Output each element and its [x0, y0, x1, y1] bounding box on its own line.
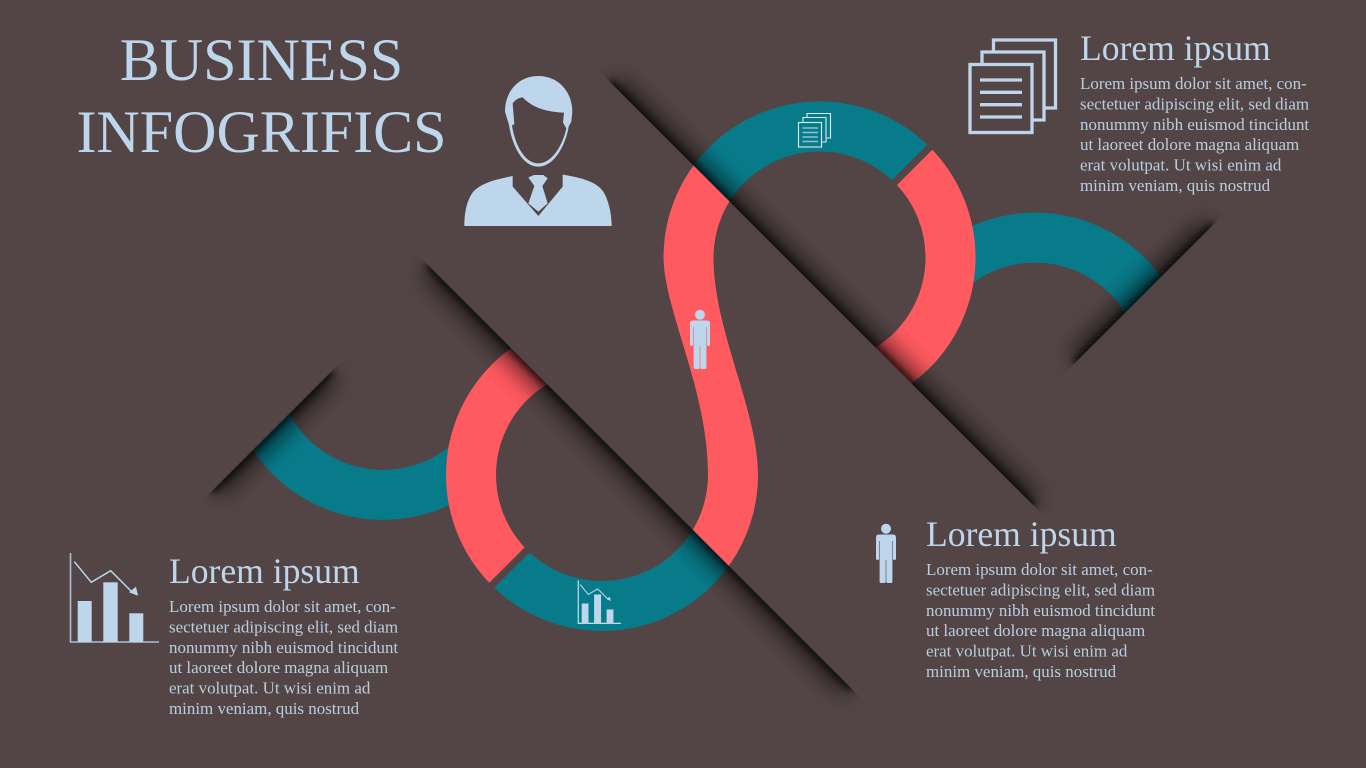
icon: chart small: [578, 580, 621, 623]
heading and body: bottom left: [169, 551, 398, 718]
fold shadow: right diagonal: [1075, 225, 1213, 363]
heading and body: bottom right: sectetuer adipiscing elit, sed diam: [926, 580, 1155, 599]
red arc: top circle: [876, 150, 976, 384]
heading and body: bottom left: minim veniam, quis nostrud: [169, 699, 360, 718]
title: [76, 27, 447, 165]
heading and body: bottom right: nonummy nibh euismod tincidunt: [926, 601, 1155, 620]
heading and body: bottom right: erat volutpat. Ut wisi enim ad: [926, 642, 1128, 661]
heading and body: bottom left: Lorem ipsum dolor sit amet, con-: [169, 597, 396, 616]
heading and body: bottom left: ut laoreet dolore magna aliquam: [169, 658, 388, 677]
heading and body: top right: minim veniam, quis nostrud: [1080, 176, 1271, 195]
red S-curve: [664, 166, 758, 566]
title: BUSINESS: [120, 27, 403, 93]
fold shadow: lower diagonal: [428, 265, 852, 689]
heading and body: bottom left: Lorem ipsum: [169, 551, 360, 591]
title: INFOGRIFICS: [76, 99, 447, 165]
heading and body: bottom right: Lorem ipsum: [926, 514, 1117, 554]
heading and body: bottom left: erat volutpat. Ut wisi enim ad: [169, 679, 371, 698]
teal arc: far left: [253, 414, 449, 520]
fold shadow: upper diagonal: [610, 82, 1034, 506]
icon: documents large: [970, 40, 1056, 132]
heading and body: bottom right: [926, 514, 1155, 681]
teal arc: top circle: [694, 102, 928, 202]
icon: businessman: [464, 76, 612, 226]
heading and body: top right: nonummy nibh euismod tincidunt: [1080, 115, 1309, 134]
red arc: bottom circle: [446, 348, 548, 583]
heading and body: bottom right: Lorem ipsum dolor sit amet, con-: [926, 560, 1153, 579]
heading and body: bottom left: nonummy nibh euismod tincidunt: [169, 638, 398, 657]
fold shadow: left diagonal: [212, 371, 332, 491]
icon: person bottom right: [876, 524, 896, 583]
heading and body: top right: erat volutpat. Ut wisi enim ad: [1080, 156, 1282, 175]
icon: person on S-curve: [690, 310, 710, 369]
heading and body: top right: [1080, 28, 1309, 195]
heading and body: bottom left: sectetuer adipiscing elit, sed diam: [169, 617, 398, 636]
heading and body: bottom right: minim veniam, quis nostrud: [926, 662, 1117, 681]
icon: documents small: [798, 114, 830, 147]
teal arc: bottom circle: [494, 530, 729, 631]
heading and body: top right: ut laoreet dolore magna aliquam: [1080, 135, 1299, 154]
heading and body: top right: Lorem ipsum dolor sit amet, con-: [1080, 74, 1307, 93]
heading and body: top right: Lorem ipsum: [1080, 28, 1271, 68]
teal arc: far right: [972, 212, 1161, 313]
heading and body: bottom right: ut laoreet dolore magna aliquam: [926, 621, 1145, 640]
icon: chart large: [70, 553, 159, 642]
heading and body: top right: sectetuer adipiscing elit, sed diam: [1080, 94, 1309, 113]
